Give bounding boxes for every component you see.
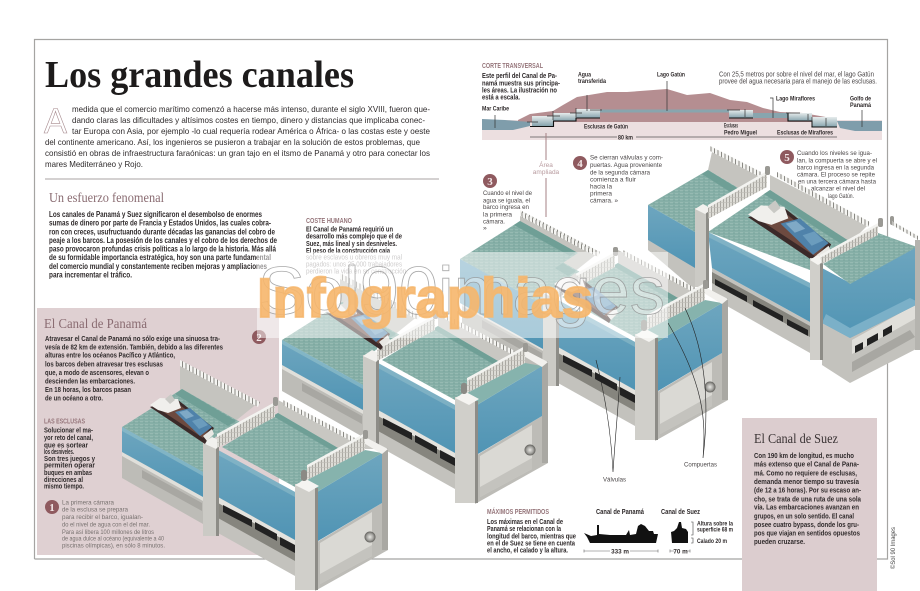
text block: Máximos permitidos bbox=[487, 507, 576, 554]
badge 5: 5 bbox=[784, 152, 790, 164]
distance line bbox=[530, 136, 837, 138]
text block: Suez: grupos, en un solo sentido. El canal bbox=[754, 511, 854, 520]
text block: Las esclusas: mismo tiempo. bbox=[44, 484, 84, 490]
text block: El Canal de Panamá: En 18 horas, los barcos pasan bbox=[45, 385, 131, 394]
title: Los grandes canales bbox=[45, 54, 354, 96]
labels: Esclusas de Miraflores bbox=[777, 130, 833, 136]
step 5 text: lan, la compuerta se abre y el bbox=[797, 157, 877, 164]
text block: Las esclusas: yor reto del canal, bbox=[44, 435, 93, 442]
labels: Lago Gatún bbox=[657, 72, 685, 78]
illustration: ship in lock C bbox=[554, 273, 618, 323]
step 4 text: de la segunda cámara bbox=[590, 170, 650, 176]
step 3 text bbox=[483, 190, 532, 232]
text block: Coste humano: perdieron la vida en su construcción. bbox=[306, 268, 408, 276]
text block: Coste humano: Suez, más lineal y sin desniveles. bbox=[306, 241, 397, 248]
text block: Corte transversal: Este perfil del Canal de Pa- bbox=[482, 73, 558, 80]
step 3 text: cámara. bbox=[483, 218, 505, 225]
text block: Máximos permitidos: Panamá se relacionan con la bbox=[487, 526, 561, 533]
credit: ©Sol 90 Images bbox=[889, 526, 897, 569]
text block: Las esclusas: LAS ESCLUSAS bbox=[44, 418, 85, 426]
text block: Coste humano: sobre esclavos u obreros muy mal bbox=[306, 255, 402, 262]
text block: Las esclusas bbox=[44, 418, 95, 490]
step 1 text: de la esclusa se prepara bbox=[62, 506, 128, 514]
dimension: height and draught: superficie 68 m bbox=[697, 526, 733, 534]
label: Válvulas: Válvulas bbox=[603, 476, 627, 484]
step 4 text: comienza a fluir bbox=[590, 176, 637, 183]
labels bbox=[482, 72, 871, 142]
lock chambers bbox=[532, 109, 837, 127]
text block: Corte transversal: les áreas. La ilustración no bbox=[482, 88, 557, 94]
text block: Las esclusas: que es sortear bbox=[44, 442, 88, 449]
text block: Suez: cho, se trata de una ruta de una sola bbox=[754, 494, 862, 503]
step 4 text: cámara. » bbox=[590, 198, 618, 204]
chart: cross section of the Panama Canal bbox=[482, 72, 882, 142]
text block: Un esfuerzo fenomenal: peaje a los barcos. La posesión de los canales y el cobro de los derechos de bbox=[49, 236, 278, 245]
text block: Un esfuerzo fenomenal: para incrementar el tráfico. bbox=[49, 270, 132, 279]
watermark band bbox=[257, 252, 668, 338]
step 3 text: barco ingresa en bbox=[483, 204, 529, 211]
watermark bbox=[257, 252, 668, 338]
illustration: lock C (centre right) bbox=[462, 210, 728, 441]
Gulf of Panama bbox=[837, 121, 882, 131]
step 5 text: Cuando los niveles se igua- bbox=[797, 150, 872, 157]
icon: Panama ship silhouette bbox=[584, 524, 658, 543]
dimension: 70 m: 70 m bbox=[673, 548, 688, 556]
intro text: medida que el comercio marítimo comenzó a hacerse más intenso, durante el siglo XVIII, fueron que- bbox=[72, 105, 430, 114]
text block: El Canal de Panamá: alturas entre los océanos Pacífico y Atlántico, bbox=[45, 350, 175, 360]
text block: El Canal de Panamá: que, a modo de ascensores, elevan o bbox=[45, 368, 149, 377]
dimension: height and draught: Calado 20 m bbox=[697, 538, 727, 545]
heading: El Canal de Suez: El Canal de Suez bbox=[754, 431, 838, 446]
panel: El Canal de Suez bbox=[742, 418, 877, 591]
badge 2 bbox=[252, 330, 266, 344]
text block: Las esclusas: permiten operar bbox=[44, 462, 95, 470]
lake Gatún bbox=[600, 110, 729, 112]
Caribbean sea bbox=[482, 119, 530, 130]
text block: Coste humano: COSTE HUMANO bbox=[306, 218, 353, 225]
text block: Suez: posee cuatro bypass, donde los gru- bbox=[754, 520, 859, 529]
text block: Un esfuerzo fenomenal bbox=[49, 210, 278, 279]
text block: Corte transversal: namá muestra sus principa- bbox=[482, 80, 561, 88]
text block: Máximos permitidos: Los máximas en el Canal de bbox=[487, 519, 563, 526]
step 4 text: Se cierran válvulas y com- bbox=[590, 154, 663, 162]
step 4 text: primera bbox=[590, 190, 612, 198]
badge 2: 2 bbox=[256, 332, 262, 344]
lake Miraflores bbox=[753, 113, 788, 118]
step 1 text: de agua dulce al océano (equivalente a 40 bbox=[62, 536, 164, 543]
text block: Coste humano bbox=[306, 218, 408, 276]
labels: transferida bbox=[578, 78, 606, 85]
step 5 text: alcanzar el nivel del bbox=[811, 186, 865, 192]
text block: Coste humano: El peso de la construcción caía bbox=[306, 248, 390, 255]
intro text bbox=[45, 105, 430, 169]
label: Canal de Suez: Canal de Suez bbox=[661, 507, 700, 516]
lock gates bbox=[527, 108, 826, 126]
badge 1: 1 bbox=[49, 502, 55, 514]
intro text: mares Mediterráneo y Rojo. bbox=[45, 160, 143, 169]
text block: Un esfuerzo fenomenal: Los canales de Panamá y Suez significaron el desembolso de enormes bbox=[49, 210, 263, 219]
labels: Esclusas de Gatún bbox=[584, 124, 628, 130]
text block: Un esfuerzo fenomenal: del comercio mundial y constantemente reciben mejoras y ampliaciones bbox=[49, 262, 268, 271]
text block: Las esclusas: buques en ambas bbox=[44, 470, 92, 477]
dimension: 333 m: 333 m bbox=[611, 548, 629, 556]
step 4 bbox=[573, 154, 663, 204]
labels: Esclusas bbox=[724, 122, 738, 130]
illustration: lock B (centre) bbox=[282, 273, 548, 504]
heading: El Canal de Panamá: El Canal de Panamá bbox=[44, 316, 147, 331]
step 4 text bbox=[590, 154, 663, 204]
divider under intro bbox=[45, 178, 439, 180]
text block: El Canal de Panamá: Atravesar el Canal de Panamá no sólo exige una sinuosa tra- bbox=[45, 334, 220, 343]
text block: Las esclusas: Solucionar el ma- bbox=[44, 428, 94, 434]
intro text: del continente americano. Así, los ingenieros se pusieron a trabajar en la solución de estos problemas, que bbox=[45, 138, 420, 147]
text block: Lago Gatún note: provee del agua necesaria para el manejo de las esclusas. bbox=[719, 78, 877, 86]
pointer: área ampliada: ampliada bbox=[533, 169, 560, 176]
text block: El Canal de Panamá: vesía de 82 km de extensión. También, debido a las diferentes bbox=[45, 342, 223, 352]
labels: 80 km bbox=[618, 134, 633, 142]
lock floors bbox=[530, 113, 837, 127]
text block: Suez: pos que viajan en sentidos opuestos bbox=[754, 528, 860, 537]
labels: Mar Caribe bbox=[482, 106, 509, 112]
step 1 text: La primera cámara bbox=[62, 500, 114, 506]
panel: El Canal de Panamá background bbox=[37, 308, 279, 555]
illustration: lock D (upper right) bbox=[648, 146, 920, 383]
step 1 text: Para así libera 100 millones de litros bbox=[62, 529, 155, 536]
labels: Pedro Miguel bbox=[724, 130, 757, 136]
step 3 text: la primera bbox=[483, 211, 512, 218]
text block: Máximos permitidos: el ancho, el calado y la altura. bbox=[487, 547, 568, 554]
step 5 text: cámara. El proceso se repite bbox=[797, 171, 875, 178]
chart: ship size comparison bbox=[584, 507, 733, 556]
pointer lines bbox=[495, 81, 862, 128]
step 1 text: piscinas olímpicas), en sólo 8 minutos. bbox=[62, 542, 165, 549]
text block: El Canal de Panamá: los barcos deben atravesar tres esclusas bbox=[45, 359, 163, 368]
text block: Las esclusas: los desniveles. bbox=[44, 449, 74, 456]
illustration: raised water in first chamber of lock C bbox=[460, 212, 590, 349]
illustration: ship in lock A bbox=[150, 394, 214, 444]
step 3 text: Cuando el nivel de bbox=[483, 190, 532, 197]
drop cap: A bbox=[44, 102, 68, 141]
text block: Coste humano: El Canal de Panamá requirió un bbox=[306, 226, 393, 234]
labels: Panamá bbox=[850, 102, 871, 109]
text block: Un esfuerzo fenomenal: paso provocaron profundas crisis políticas a lo largo de la historia. Más allá bbox=[49, 245, 277, 254]
intro text: consistió en obras de infraestructura faraónicas: un gran tajo en el itsmo de Panamá y otro para conectar los bbox=[45, 149, 430, 158]
text block: Un esfuerzo fenomenal: de su formidable importancia estratégica, hoy son una parte fundamental bbox=[49, 253, 271, 262]
pointer: área ampliada bbox=[533, 133, 560, 217]
text block: Suez: pueden cruzarse. bbox=[754, 537, 805, 546]
text block: Suez: más extenso que el Canal de Pana- bbox=[754, 460, 859, 469]
step 3 bbox=[483, 174, 532, 232]
text block: Corte transversal: CORTE TRANSVERSAL bbox=[482, 63, 543, 70]
text block: Máximos permitidos: en el de Suez se tiene en cuenta bbox=[487, 540, 575, 547]
step 3 text: agua se iguala, el bbox=[483, 197, 530, 204]
step 1 text: para recibir el barco, igualan- bbox=[62, 514, 143, 521]
step 1 text: do el nivel de agua con el del mar. bbox=[62, 521, 150, 528]
icon: Suez ship silhouette bbox=[671, 522, 688, 543]
step 5 text: barco ingresa en la segunda bbox=[797, 164, 874, 172]
text block: Máximos permitidos: longitud del barco, mientras que bbox=[487, 533, 576, 540]
step 5 text: lago Gatún. bbox=[828, 193, 854, 200]
step 3 text: » bbox=[483, 225, 487, 232]
step 4 text: hacia la bbox=[590, 183, 612, 190]
dimension: height and draught: Altura sobre la bbox=[697, 520, 733, 528]
callout lines: válvulas y compuertas bbox=[596, 308, 706, 472]
text block: Corte transversal: está a escala. bbox=[482, 94, 520, 102]
text block: Lago Gatún note: Con 25,5 metros por sobre el nivel del mar, el lago Gatún bbox=[719, 72, 874, 78]
labels: Golfo de bbox=[850, 96, 871, 102]
intro text: dando claras las dificultades y altísimos costes en tiempo, dinero y distancias que implicaba conec- bbox=[72, 116, 425, 125]
step 1 text bbox=[62, 500, 165, 549]
heading: Un esfuerzo fenomenal: Un esfuerzo fenomenal bbox=[49, 191, 164, 206]
text block: Suez bbox=[754, 451, 862, 546]
step 5 text bbox=[797, 150, 877, 200]
text block: Suez: demanda menor tiempo su travesía bbox=[754, 477, 860, 486]
step 5 text: en una tercera cámara hasta bbox=[798, 178, 876, 186]
labels: Agua bbox=[578, 72, 591, 78]
text block: Suez: Con 190 km de longitud, es mucho bbox=[754, 451, 854, 460]
watermark orange text: Infographias bbox=[257, 266, 593, 329]
text block: Corte transversal bbox=[482, 63, 561, 102]
dimension: height and draught bbox=[691, 520, 733, 545]
text block: Máximos permitidos: MÁXIMOS PERMITIDOS bbox=[487, 507, 549, 516]
text block: Un esfuerzo fenomenal: ron con creces, usufructuando durante décadas las ganancias del cobro de bbox=[49, 227, 276, 236]
text block: Coste humano: desarrollo más complejo que el de bbox=[306, 234, 402, 241]
text block: Suez: (de 12 a 16 horas). Por su escaso an- bbox=[754, 486, 861, 495]
badge 3: 3 bbox=[487, 176, 493, 188]
label: Canal de Panamá: Canal de Panamá bbox=[596, 507, 645, 516]
illustration: ship in lock B bbox=[326, 300, 390, 350]
intro text: tar Europa con Asia, por ejemplo -lo cual requería rodear América o África- o las costas este y oeste bbox=[72, 126, 430, 136]
text block: Suez: vía. Las embarcaciones avanzan en bbox=[754, 503, 859, 512]
text block: El Canal de Panamá: descienden las embarcaciones. bbox=[45, 376, 135, 386]
labels: Lago Miraflores bbox=[776, 96, 815, 102]
pointer: área ampliada: Área bbox=[539, 160, 553, 169]
text block: Lago Gatún note bbox=[719, 72, 877, 86]
text block: Un esfuerzo fenomenal: sumas de dinero por parte de Francia y Estados Unidos, las cuales cobra- bbox=[49, 219, 271, 228]
text block: Coste humano: pagados: unos 25 000 trabajadores bbox=[306, 261, 402, 268]
step 1 bbox=[45, 500, 165, 549]
terrain base bbox=[482, 120, 882, 140]
badge 4: 4 bbox=[577, 158, 583, 170]
step 5 bbox=[780, 150, 877, 200]
mountains bbox=[518, 89, 837, 122]
watermark outline text: Sol90images bbox=[258, 253, 665, 329]
illustration: lock A (lower left) bbox=[122, 360, 388, 591]
text block: Las esclusas: Son tres juegos y bbox=[44, 456, 95, 463]
text block: El Canal de Panamá: de un océano a otro. bbox=[45, 394, 103, 402]
text block: Suez: má. Como no requiere de esclusas, bbox=[754, 468, 857, 477]
text block: Las esclusas: direcciones al bbox=[44, 477, 83, 484]
step 4 text: puertas. Agua proveniente bbox=[590, 162, 662, 169]
dimension: 333 m bbox=[584, 548, 658, 556]
label: Compuertas: Compuertas bbox=[684, 462, 718, 468]
text block: El Canal de Panamá bbox=[45, 334, 223, 402]
